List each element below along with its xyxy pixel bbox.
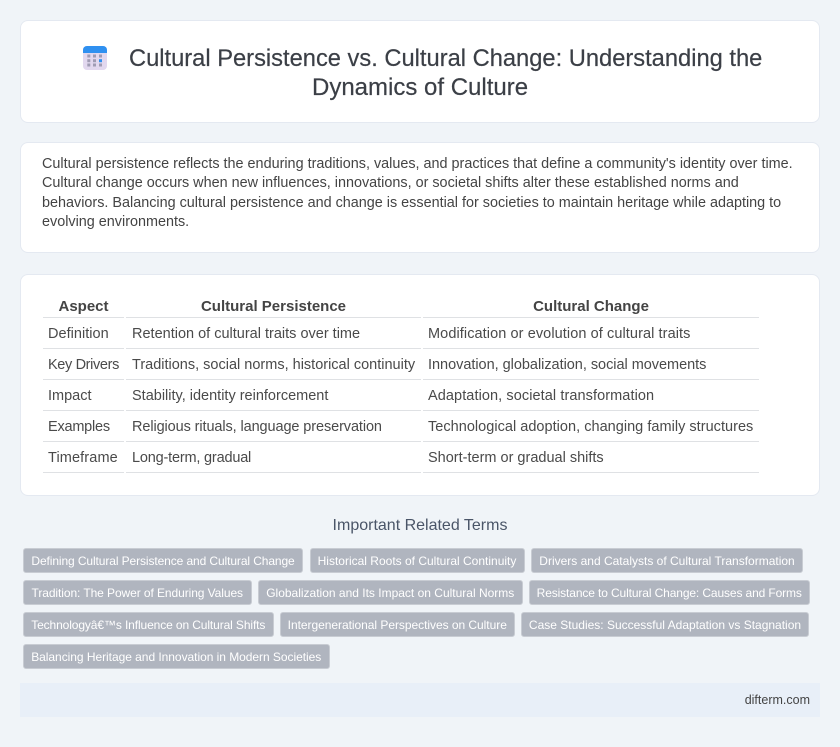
related term tags: Technologyâ€™s Influence on Cultural Shifts [31, 618, 265, 632]
related term tags: Historical Roots of Cultural Continuity [318, 554, 516, 568]
panel: comparison table [20, 274, 820, 496]
table header [58, 298, 649, 315]
title: Dynamics of Culture [312, 74, 528, 101]
row: key drivers [48, 357, 706, 373]
row: definition: Modification or evolution of cultural traits [428, 326, 690, 342]
related term tags: Defining Cultural Persistence and Cultural Change [31, 554, 295, 568]
footer: site name: difterm.com [745, 693, 810, 707]
footer bar [20, 683, 820, 717]
row: timeframe: Timeframe [48, 450, 118, 466]
row: examples [48, 419, 753, 435]
row: timeframe [48, 450, 604, 466]
title: Cultural Persistence vs. Cultural Change: Understanding the [129, 46, 762, 72]
table [43, 298, 759, 473]
related term tags: Balancing Heritage and Innovation in Modern Societies [31, 650, 321, 664]
table header: Cultural Change [533, 298, 649, 315]
title [129, 46, 762, 101]
panel: introduction [20, 142, 820, 253]
row: key drivers: Traditions, social norms, historical continuity [132, 357, 415, 373]
row: timeframe: Long-term, gradual [132, 450, 251, 466]
related term tags [23, 548, 810, 669]
row: examples: Examples [48, 419, 110, 435]
related term tags: Resistance to Cultural Change: Causes and Forms [537, 586, 802, 600]
table header: Cultural Persistence [201, 298, 346, 315]
table header: Aspect [58, 298, 109, 315]
icon: calendar [83, 46, 107, 70]
row: key drivers: Key Drivers [48, 357, 119, 373]
row: definition: Definition [48, 326, 109, 342]
row: impact: Adaptation, societal transformation [428, 388, 654, 404]
intro text: Cultural change occurs when new influences, innovations, or societal shifts alter these established norms and [42, 175, 739, 191]
row: examples: Technological adoption, changing family structures [428, 419, 753, 435]
intro text: evolving environments. [42, 214, 189, 230]
intro text: behaviors. Balancing cultural persistence and change is essential for societies to maintain heritage while adapting to [42, 195, 781, 211]
row: definition [48, 326, 690, 342]
related term tags: Case Studies: Successful Adaptation vs Stagnation [529, 618, 801, 632]
intro text [42, 156, 793, 230]
row: key drivers: Innovation, globalization, social movements [428, 357, 706, 373]
intro text: Cultural persistence reflects the enduring traditions, values, and practices that define a community's identity over time. [42, 156, 793, 172]
row: examples: Religious rituals, language preservation [132, 419, 382, 435]
row: impact: Stability, identity reinforcement [132, 388, 328, 404]
related term tags: Globalization and Its Impact on Cultural Norms [266, 586, 514, 600]
heading: related terms: Important Related Terms [333, 517, 507, 534]
header card [20, 20, 820, 123]
row: impact [48, 388, 654, 404]
related term tags: Intergenerational Perspectives on Culture [288, 618, 507, 632]
row: timeframe: Short-term or gradual shifts [428, 450, 604, 466]
related term tags: Drivers and Catalysts of Cultural Transformation [539, 554, 795, 568]
row: impact: Impact [48, 388, 92, 404]
row: definition: Retention of cultural traits over time [132, 326, 360, 342]
related term tags: Tradition: The Power of Enduring Values [32, 586, 243, 600]
